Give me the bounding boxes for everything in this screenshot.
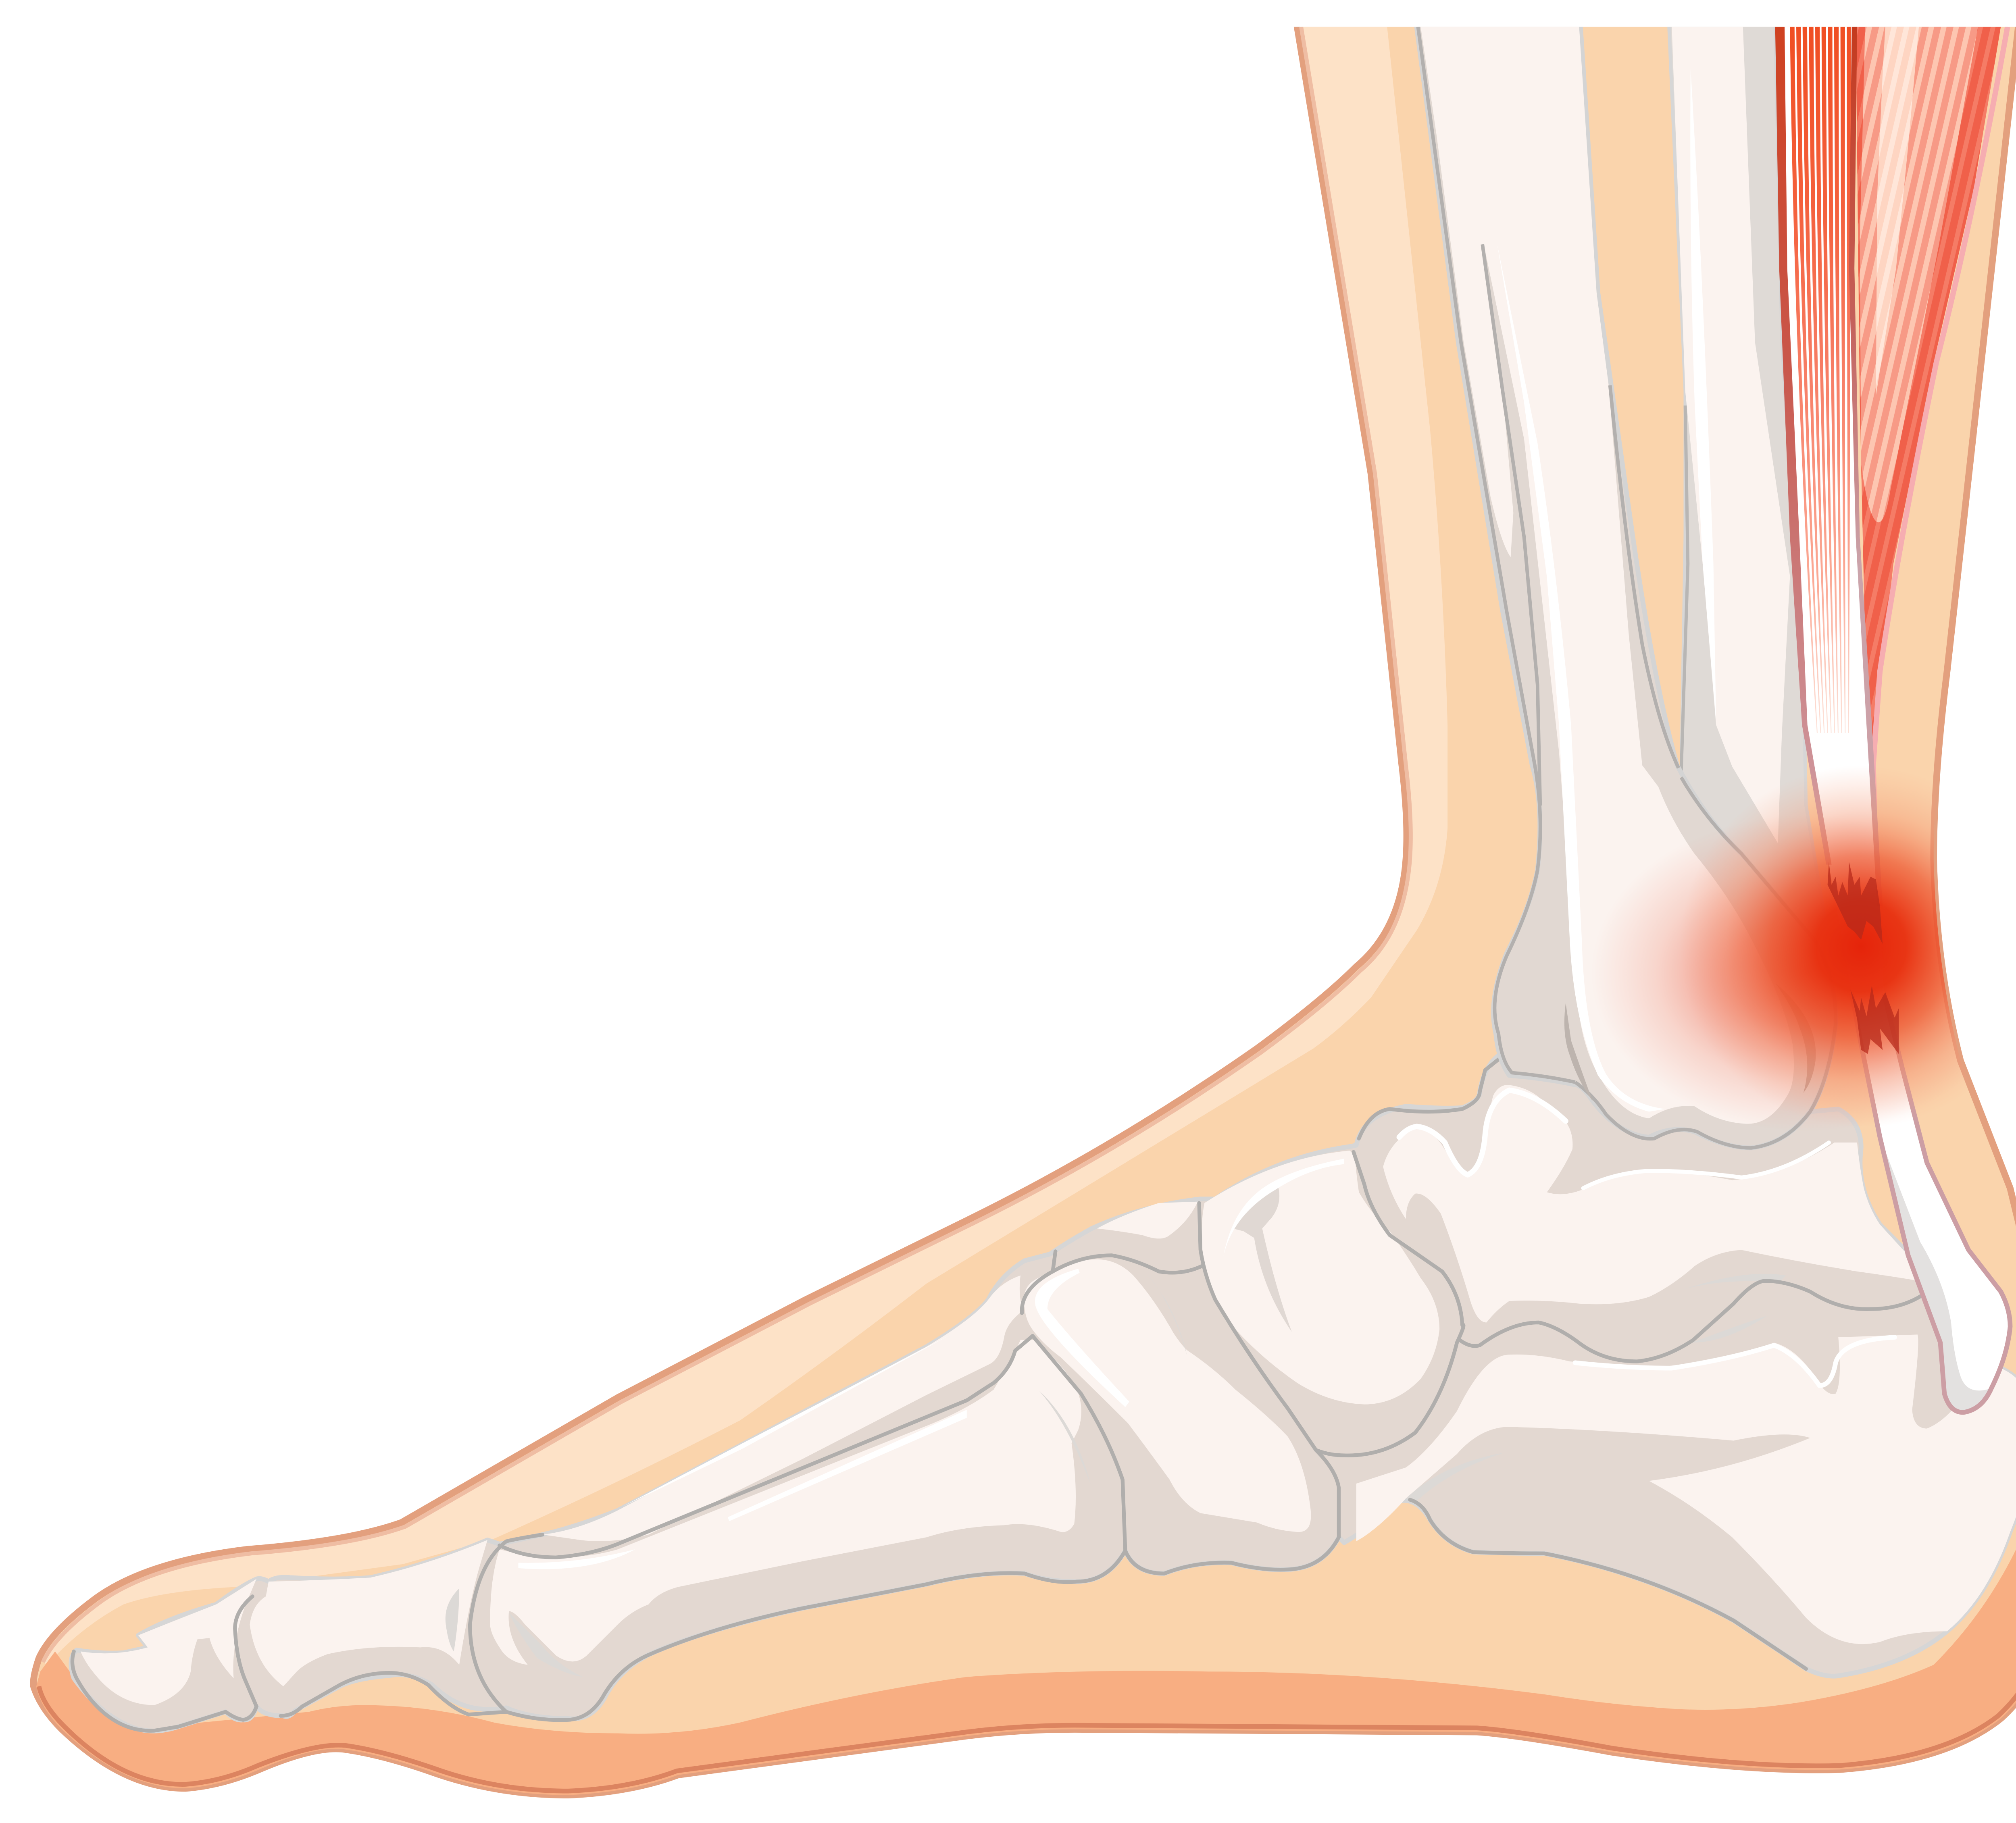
- calf muscle: [1856, 27, 2008, 859]
- bones: joint outlines: [72, 1059, 1922, 1731]
- medial cuneiform: [1024, 1259, 1311, 1532]
- second metatarsal: [542, 1276, 1023, 1541]
- middle phalanx: [250, 1540, 487, 1686]
- bones: lit bone surfaces: [81, 1085, 2016, 1705]
- skin: sole fat pad: [36, 1550, 2016, 1795]
- fibula shadow body: [1669, 20, 1826, 941]
- bones: white highlights: [519, 1159, 1344, 1569]
- muscle pale belly: [1860, 27, 1978, 522]
- tendon lower shadow: [1880, 1137, 1991, 1413]
- calcaneus: [1356, 1334, 2016, 1644]
- tibia shadow body: [1416, 20, 1836, 1148]
- muscle lightest stripe: [1876, 27, 1919, 396]
- skin: inner dorsal edge line: [43, 27, 1411, 1662]
- tendon lower outline: [1852, 993, 2010, 1413]
- wide glow over ankle: [1591, 815, 2016, 1132]
- bones: foot skeleton silhouette: [71, 1055, 2016, 1731]
- tibia: [1416, 20, 1836, 1148]
- upper torn end: [1828, 862, 1883, 944]
- fibula lit surface: [1672, 27, 1790, 843]
- fibula inner edge: [1681, 406, 1688, 772]
- fibula: [1669, 20, 1826, 941]
- tendon right edge: [1849, 27, 1883, 906]
- inflammation glow: [1591, 765, 2016, 1132]
- skin: light dorsal band: [42, 27, 1447, 1665]
- skin: sole darker edge line: [39, 1396, 2016, 1791]
- talus: [1383, 1085, 1919, 1322]
- tendon fibres: [1790, 27, 1851, 733]
- navicular: [1202, 1151, 1439, 1405]
- tibia inner shadow line: [1564, 1003, 1593, 1101]
- tendon left edge: [1775, 27, 1832, 865]
- tibia highlight: [1497, 244, 1665, 1112]
- malleolus crescent: [1775, 983, 1816, 1093]
- distal toe phalanx: [81, 1579, 256, 1705]
- lower torn end: [1850, 986, 1899, 1054]
- tendon upper body: [1776, 27, 1884, 993]
- bones: white highlight lines: [1399, 1090, 1895, 1386]
- muscle pink sheath: [1873, 27, 2008, 859]
- bones: soft grey surface marks: [446, 1183, 1786, 1677]
- torn tendon fibres: [1828, 862, 1899, 1054]
- muscle body: [1856, 27, 2001, 765]
- tibia outlines: [1418, 27, 1836, 1148]
- intermediate cuneiform: [1097, 1202, 1198, 1238]
- first metatarsal: [490, 1340, 1081, 1665]
- achilles tendon: [1775, 27, 2010, 1413]
- tendon lower body: [1852, 993, 2010, 1413]
- tibia lit surface: [1421, 27, 1794, 1124]
- fibula highlight: [1690, 69, 1716, 722]
- core glow at rupture: [1680, 765, 2016, 1128]
